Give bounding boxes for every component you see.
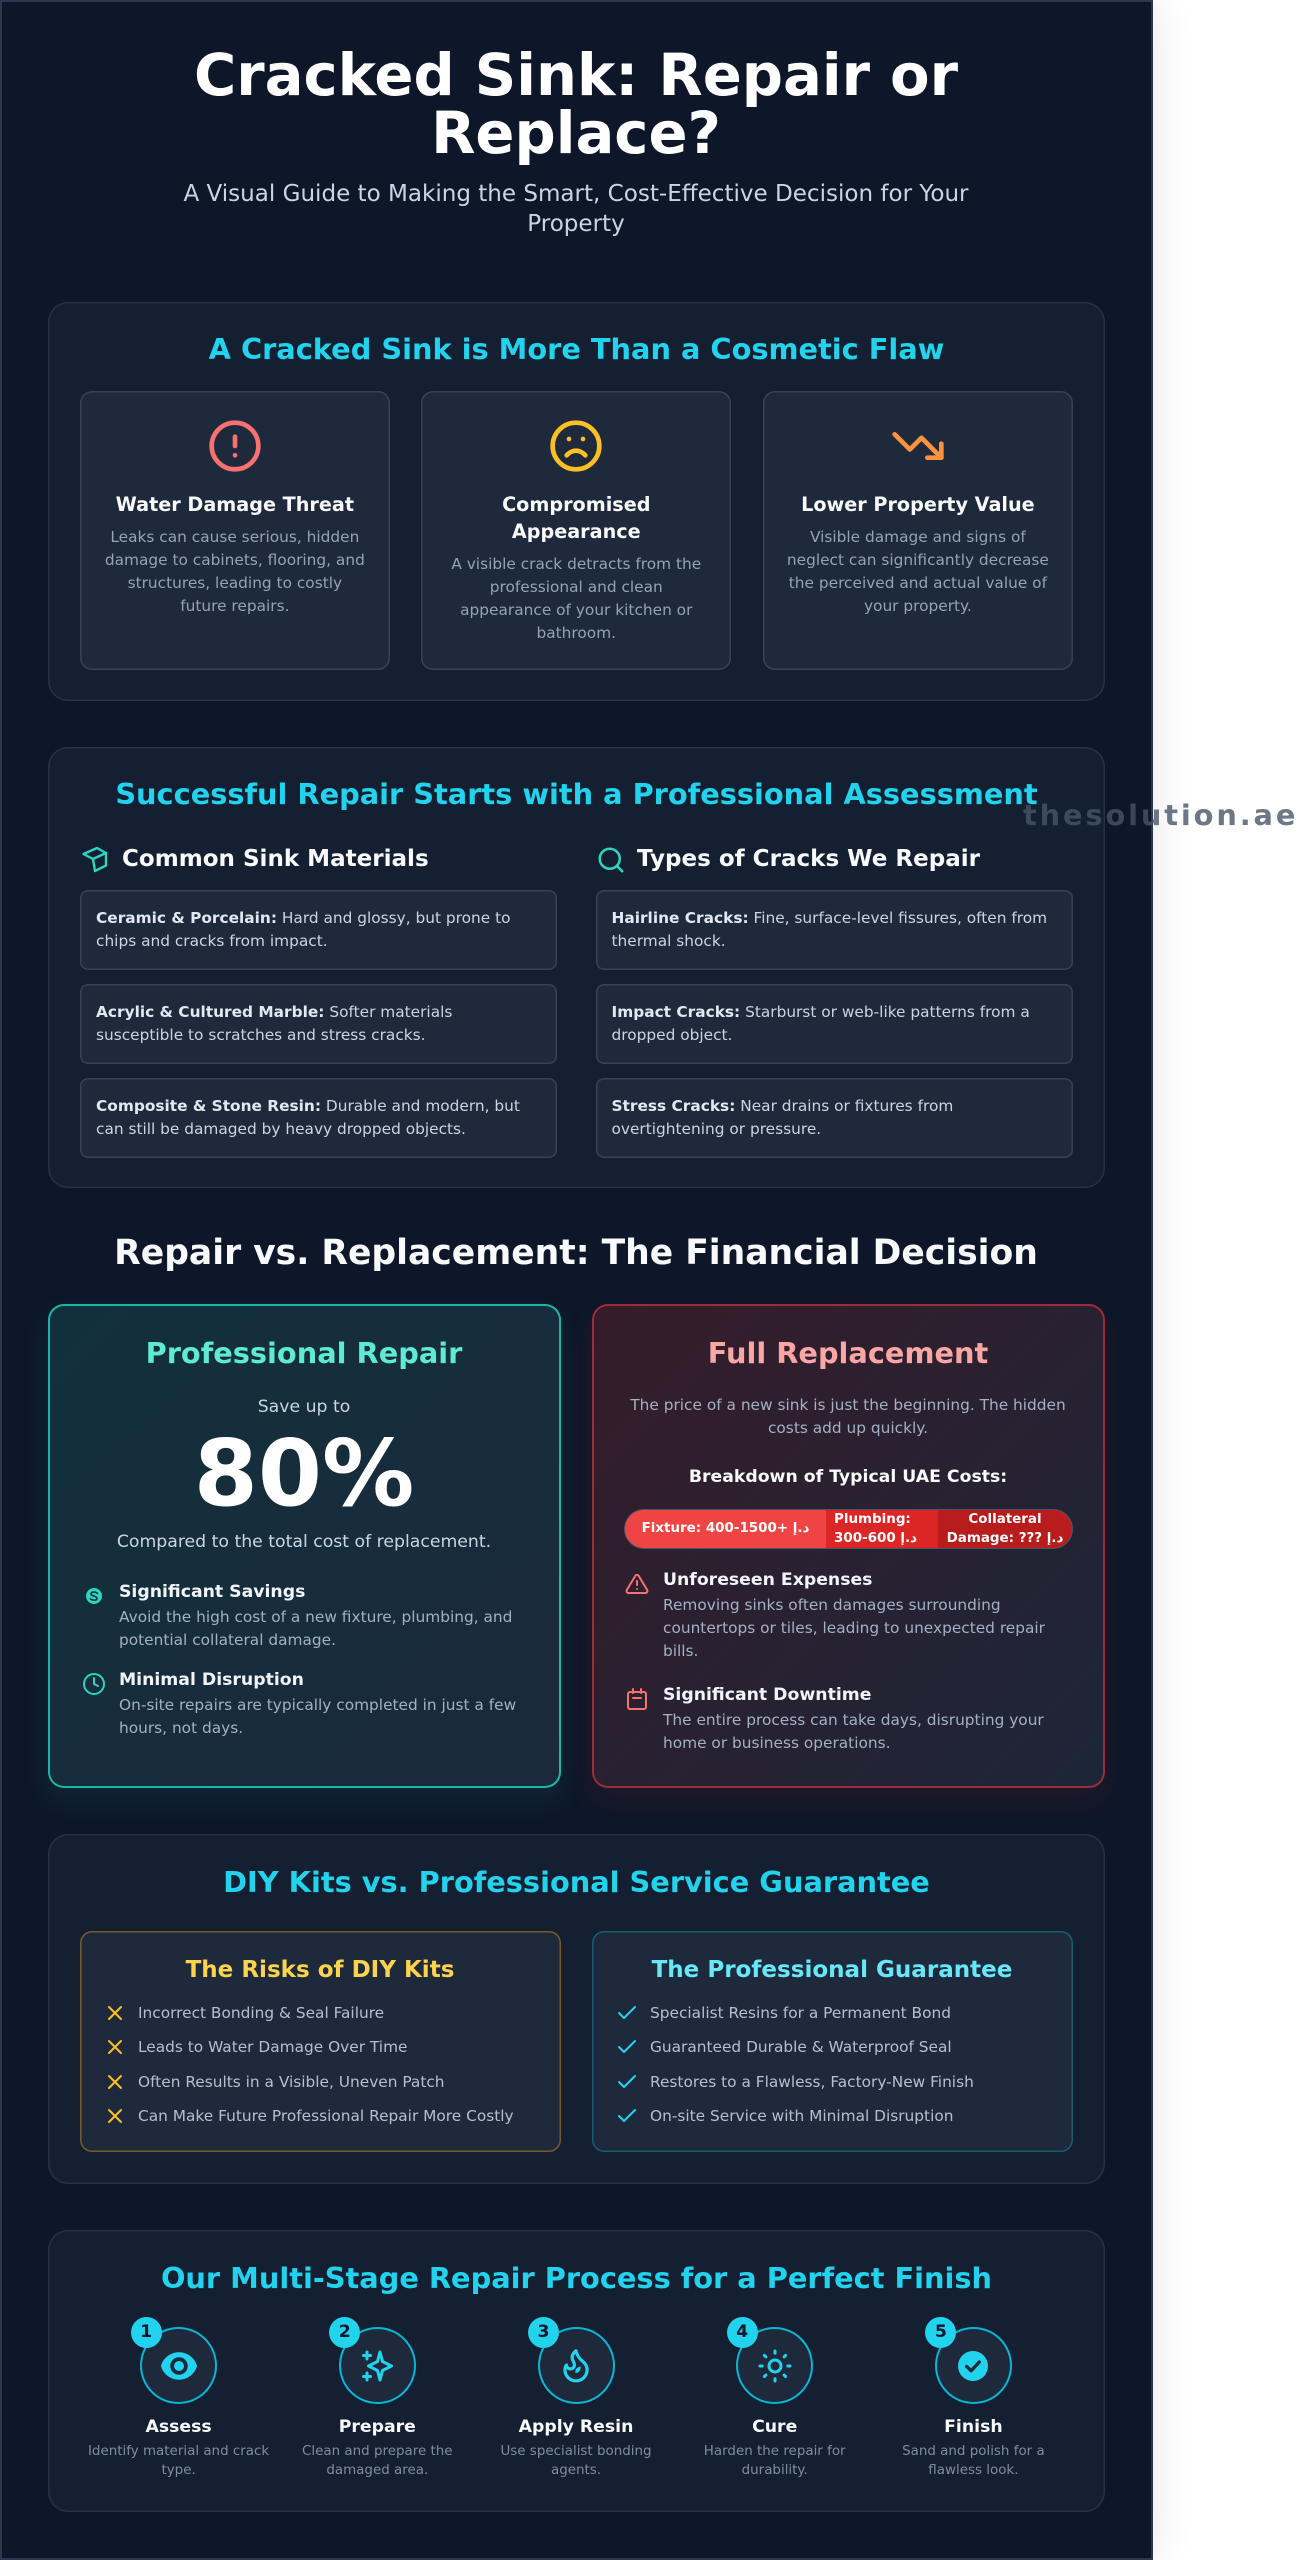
benefit: disruption: Minimal Disruption	[119, 1670, 304, 1690]
icon: savings	[86, 1588, 102, 1604]
risk text	[663, 1596, 1045, 1660]
card title: Lower Property Value	[801, 492, 1035, 516]
card text: your property.	[864, 597, 972, 615]
subtitle: A Visual Guide to Making the Smart, Cost-Effective Decision for Your	[183, 181, 969, 207]
benefit: savings	[119, 1582, 512, 1649]
panel: repair process	[48, 2230, 1105, 2512]
replacement intro: The price of a new sink is just the beginning. The hidden	[630, 1396, 1066, 1414]
risk text: Removing sinks often damages surrounding	[663, 1596, 1001, 1614]
guarantee 4: On-site Service with Minimal Disruption	[650, 2107, 953, 2125]
card title: Compromised	[502, 492, 650, 516]
card text	[105, 528, 365, 615]
item: impact: dropped object.	[612, 1026, 732, 1044]
item: hairline: thermal shock.	[612, 932, 726, 950]
step ring with sun icon	[736, 2327, 813, 2404]
step number	[727, 2317, 758, 2348]
card title	[502, 492, 650, 542]
heading: DIY Kits vs. Professional Service Guarantee	[223, 1865, 930, 1899]
segment: plumbing: 300-600 د.إ	[834, 1531, 917, 1546]
step title: Assess	[146, 2417, 212, 2437]
card text: neglect can significantly decrease	[787, 551, 1049, 569]
card text: structures, leading to costly	[128, 574, 342, 592]
panel: cosmetic flaw	[48, 302, 1105, 701]
panel: full replacement	[592, 1304, 1105, 1788]
risk 3: Often Results in a Visible, Uneven Patch	[138, 2072, 445, 2090]
step 2	[302, 2317, 453, 2478]
step title: Finish	[944, 2417, 1003, 2437]
card text: bathroom.	[536, 624, 616, 642]
segment: collateral	[938, 1510, 1072, 1548]
heading: Successful Repair Starts with a Professional Assessment	[115, 777, 1038, 811]
card text: the perceived and actual value of	[789, 574, 1047, 592]
icon: alert circle	[209, 420, 261, 472]
item: hairline: Hairline Cracks: Fine, surface-level fissures, often from	[612, 908, 1047, 926]
icon: frown	[550, 420, 602, 472]
panel: professional assessment	[48, 747, 1105, 1188]
card text	[787, 528, 1049, 615]
step number: 5	[935, 2322, 947, 2342]
step text: Sand and polish for a	[902, 2444, 1045, 2459]
card: DIY risks	[80, 1931, 561, 2152]
item: composite: can still be damaged by heavy dropped objects.	[96, 1120, 466, 1138]
segment: collateral: Collateral	[968, 1512, 1042, 1527]
step text: damaged area.	[326, 2463, 428, 2478]
card: water damage threat	[80, 390, 390, 670]
title: Replace?	[431, 100, 721, 167]
step text: Clean and prepare the	[302, 2444, 453, 2459]
item: stress	[596, 1078, 1073, 1158]
icon: check	[618, 2040, 636, 2053]
card: lower property value	[763, 390, 1073, 670]
card title: Water Damage Threat	[116, 492, 354, 516]
icon: x	[108, 2075, 122, 2089]
guarantee 1: Specialist Resins for a Permanent Bond	[650, 2004, 951, 2022]
step ring with sparkle icon	[339, 2327, 416, 2404]
item: hairline	[596, 890, 1073, 970]
risk: significant downtime	[662, 1685, 1044, 1752]
risk: unforeseen expenses	[663, 1570, 1045, 1660]
replacement title: Full Replacement	[708, 1336, 988, 1370]
header	[183, 42, 969, 237]
segment: fixture: Fixture: 400-1500+ د.إ	[642, 1521, 809, 1536]
icon: trending down	[892, 432, 944, 460]
icon: clock	[83, 1673, 105, 1695]
item: acrylic: Acrylic & Cultured Marble: Softer materials	[96, 1002, 452, 1020]
guarantee 3: Restores to a Flawless, Factory-New Finish	[650, 2072, 974, 2090]
step text: type.	[161, 2463, 196, 2478]
step title: Prepare	[339, 2417, 416, 2437]
icon: warning triangle	[626, 1574, 648, 1594]
step title: Apply Resin	[519, 2417, 633, 2437]
item: ceramic	[80, 890, 557, 970]
repair title: Professional Repair	[146, 1336, 462, 1370]
item: acrylic: susceptible to scratches and stress cracks.	[96, 1026, 426, 1044]
item: impact: Impact Cracks: Starburst or web-like patterns from a	[612, 1002, 1030, 1020]
replacement intro	[630, 1396, 1066, 1437]
item: stress: Stress Cracks: Near drains or fixtures from	[612, 1096, 953, 1114]
subheading: crack types: Types of Cracks We Repair	[637, 846, 980, 872]
subtitle	[183, 181, 969, 237]
risk text: bills.	[663, 1642, 698, 1660]
step number	[528, 2317, 559, 2348]
card text: Visible damage and signs of	[810, 528, 1026, 546]
step text: agents.	[551, 2463, 601, 2478]
card text: professional and clean	[490, 578, 663, 596]
segment: plumbing	[826, 1510, 938, 1548]
replacement intro: costs add up quickly.	[768, 1419, 928, 1437]
card text: damage to cabinets, flooring, and	[105, 551, 365, 569]
icon: check	[618, 2109, 636, 2122]
panel: DIY vs professional	[48, 1834, 1105, 2184]
item: composite	[80, 1078, 557, 1158]
segment: fixture	[625, 1510, 826, 1548]
icon: cube	[82, 846, 108, 872]
step text	[477, 2442, 675, 2480]
step text: Harden the repair for	[704, 2444, 846, 2459]
step title: Cure	[752, 2417, 797, 2437]
title: Cracked Sink: Repair or	[194, 42, 958, 109]
step text: durability.	[742, 2463, 808, 2478]
step number: 2	[339, 2322, 351, 2342]
card title: The Risks of DIY Kits	[186, 1957, 454, 1983]
step number	[925, 2317, 956, 2348]
icon: x	[108, 2006, 122, 2020]
step number: 4	[736, 2322, 748, 2342]
card text: future repairs.	[180, 597, 289, 615]
step ring with flame icon	[538, 2327, 614, 2404]
title	[194, 42, 958, 167]
item: ceramic: chips and cracks from impact.	[96, 932, 328, 950]
card text: Leaks can cause serious, hidden	[110, 528, 359, 546]
benefit: savings: Significant Savings	[119, 1582, 305, 1602]
icon: x	[108, 2109, 122, 2123]
segment: plumbing: Plumbing:	[834, 1512, 911, 1527]
step number: 1	[140, 2322, 152, 2342]
risk text: countertops or tiles, leading to unexpected repair	[663, 1619, 1045, 1637]
guarantee list	[618, 2004, 974, 2125]
benefit text: hours, not days.	[119, 1719, 243, 1737]
step 5	[874, 2317, 1072, 2487]
heading: financial decision: Repair vs. Replacement: The Financial Decision	[114, 1233, 1038, 1273]
risk text	[662, 1710, 1044, 1752]
card title: Appearance	[512, 520, 641, 542]
step 4	[676, 2317, 874, 2487]
icon: check	[618, 2006, 636, 2019]
step number	[329, 2317, 360, 2348]
heading: Our Multi-Stage Repair Process for a Perfect Finish	[161, 2260, 992, 2294]
benefit: disruption	[119, 1670, 516, 1737]
step text: flawless look.	[928, 2463, 1018, 2478]
icon: x	[108, 2040, 122, 2054]
step ring with eye icon	[140, 2327, 217, 2404]
breakdown heading: Breakdown of Typical UAE Costs:	[689, 1467, 1007, 1487]
risk 4: Can Make Future Professional Repair More Costly	[138, 2107, 514, 2125]
card text: appearance of your kitchen or	[460, 601, 692, 619]
card text: A visible crack detracts from the	[451, 554, 701, 572]
item: impact	[596, 984, 1073, 1064]
risk 1: Incorrect Bonding & Seal Failure	[138, 2004, 384, 2022]
step text	[302, 2444, 453, 2478]
risk: significant downtime: Significant Downtime	[663, 1685, 871, 1705]
step number: 3	[537, 2322, 550, 2342]
item: ceramic: Ceramic & Porcelain: Hard and glossy, but prone to	[96, 908, 511, 926]
icon: check	[618, 2075, 636, 2088]
item: acrylic	[80, 984, 557, 1064]
icon: calendar	[627, 1688, 647, 1710]
step text: Use specialist bonding	[500, 2444, 652, 2459]
risk text: home or business operations.	[663, 1734, 890, 1752]
step text	[874, 2442, 1072, 2480]
risk 2: Leads to Water Damage Over Time	[138, 2038, 407, 2056]
icon: search	[598, 848, 624, 873]
benefit text	[119, 1608, 512, 1649]
risk text: The entire process can take days, disrupting your	[663, 1710, 1044, 1728]
watermark: thesolution.ae	[1023, 798, 1298, 832]
item: stress: overtightening or pressure.	[612, 1120, 821, 1138]
risk list	[108, 2004, 514, 2125]
save label: Save up to	[258, 1397, 350, 1417]
stacked cost bar	[625, 1510, 1072, 1548]
comparison note: Compared to the total cost of replacement.	[117, 1532, 491, 1552]
card text	[451, 554, 701, 642]
card: compromised appearance	[421, 390, 731, 670]
benefit text: potential collateral damage.	[119, 1631, 336, 1649]
risk: unforeseen expenses: Unforeseen Expenses	[663, 1570, 872, 1590]
step text	[676, 2442, 874, 2480]
step 3	[500, 2317, 652, 2478]
benefit text	[119, 1696, 516, 1737]
step 1	[88, 2317, 269, 2478]
benefit text: On-site repairs are typically completed in just a few	[119, 1696, 516, 1714]
step ring with check icon	[935, 2327, 1012, 2404]
step text: Identify material and crack	[88, 2444, 269, 2459]
benefit text: Avoid the high cost of a new fixture, plumbing, and	[119, 1608, 512, 1626]
item: composite: Composite & Stone Resin: Durable and modern, but	[96, 1096, 520, 1114]
card: professional guarantee	[592, 1931, 1073, 2152]
panel: professional repair	[48, 1304, 561, 1788]
step text	[88, 2444, 269, 2478]
subtitle: Property	[527, 211, 625, 237]
step number	[131, 2317, 162, 2348]
heading: A Cracked Sink is More Than a Cosmetic Flaw	[209, 332, 944, 366]
subheading: materials: Common Sink Materials	[122, 846, 429, 872]
guarantee 2: Guaranteed Durable & Waterproof Seal	[650, 2038, 952, 2056]
segment: collateral: Damage: ??? د.إ	[947, 1531, 1063, 1546]
big number: 80%	[194, 1419, 414, 1527]
card title: The Professional Guarantee	[652, 1957, 1012, 1983]
